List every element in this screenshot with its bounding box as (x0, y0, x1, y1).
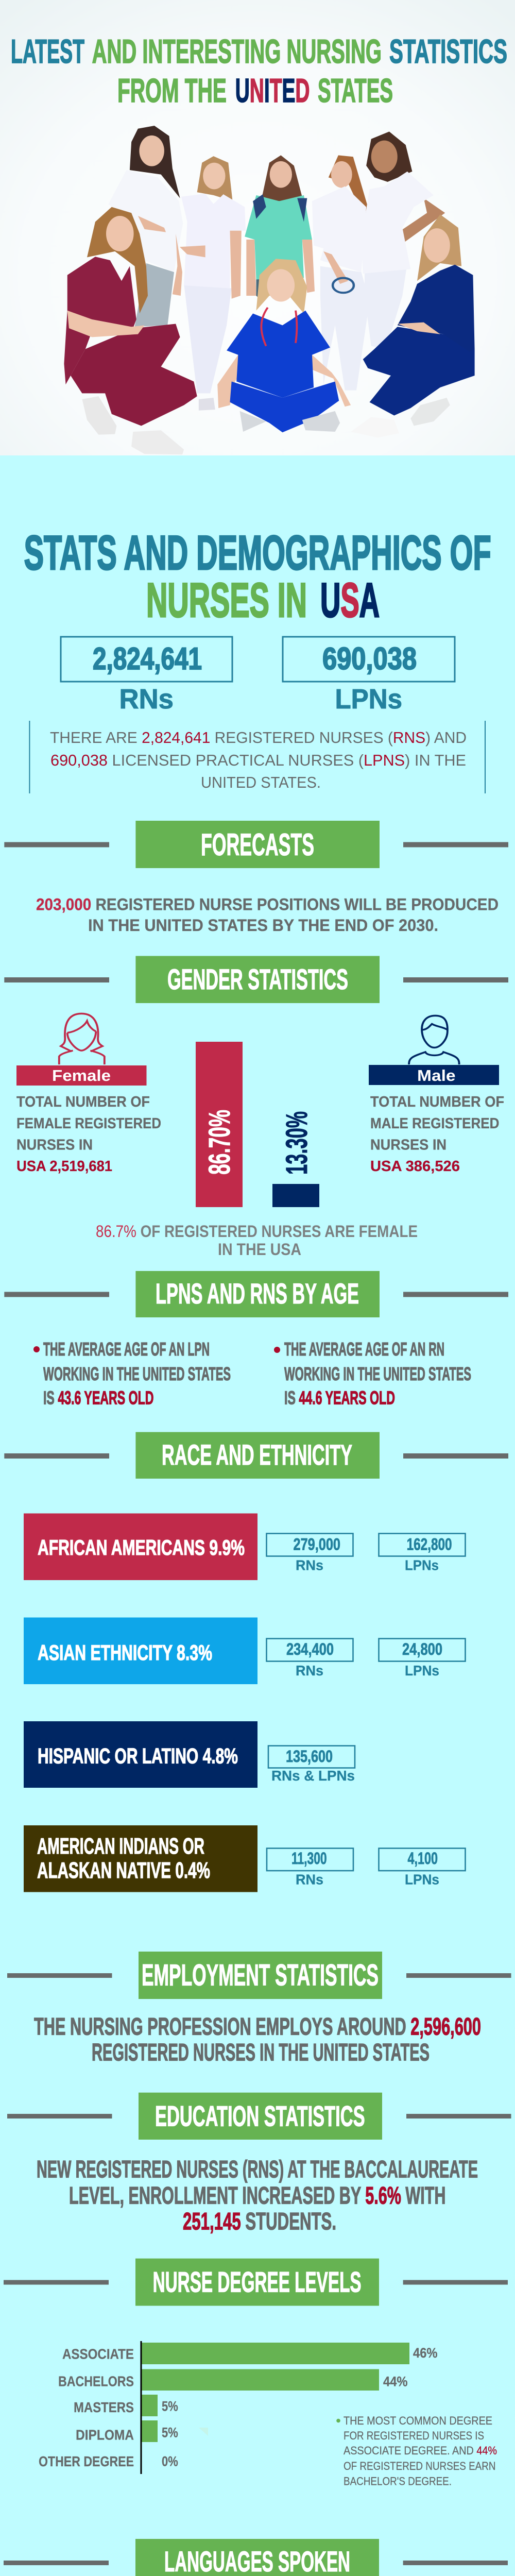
panel: African Americans: 279,000 (294, 1535, 340, 1554)
panel: American Indians or Alaskan Native: LPNs (405, 1872, 439, 1888)
text block: female registered nurses: USA 2,519,681 (16, 1158, 112, 1175)
title: STATES (318, 72, 393, 109)
bar chart: nurse degree levels: OTHER DEGREE (39, 2453, 134, 2469)
panel: American Indians or Alaskan Native: 11,300 (291, 1849, 327, 1868)
text block: average LPN age (33, 1338, 231, 1409)
text block: average LPN age: IS 43.6 YEARS OLD (43, 1387, 153, 1409)
text block: gender caption: 86.7% OF REGISTERED NURSES ARE FEMALE (96, 1222, 418, 1241)
stat: RNs count: RNs (119, 684, 174, 715)
text block: male registered nurses: TOTAL NUMBER OF (370, 1094, 504, 1110)
panel: African Americans: RNs (296, 1557, 323, 1573)
bar chart: nurse degree levels: MASTERS (74, 2399, 134, 2415)
callout: most common degree: THE MOST COMMON DEGREE (344, 2414, 492, 2427)
hero photo: group of nurses (0, 0, 515, 455)
text block: average LPN age: THE AVERAGE AGE OF AN LPN (43, 1338, 210, 1360)
title: LATEST (11, 32, 84, 70)
section heading: education statistics (7, 2093, 511, 2140)
nurse: back right in white (362, 131, 445, 349)
text block: gender caption (96, 1222, 418, 1259)
text block: education: 251,145 STUDENTS. (183, 2207, 336, 2235)
section heading: languages spoken (4, 2539, 508, 2576)
text block: female registered nurses (16, 1094, 161, 1175)
section heading: education statistics: EDUCATION STATISTICS (155, 2100, 365, 2132)
section heading: nurse degree levels (4, 2259, 508, 2306)
bar chart: nurse degree levels (39, 2341, 438, 2474)
text block: RN and LPN totals (29, 721, 486, 793)
title (11, 32, 507, 109)
label: female: Female (52, 1066, 111, 1084)
text block: average RN age (274, 1338, 471, 1409)
section heading: gender statistics (4, 956, 508, 1003)
stat: LPNs count: LPNs (335, 684, 402, 715)
text block: education (37, 2156, 478, 2235)
nurse: front right in navy (351, 214, 475, 438)
heading: stats and demographics: NURSES IN (146, 573, 307, 627)
text block: average RN age: IS 44.6 YEARS OLD (284, 1387, 395, 1409)
text block: forecast (36, 895, 499, 935)
panel: Hispanic or Latino: RNs & LPNs (271, 1768, 355, 1784)
text block: male registered nurses: NURSES IN (370, 1137, 447, 1153)
nurse: front centre in blue (217, 259, 351, 432)
bar chart: nurse degree levels: DIPLOMA (76, 2427, 134, 2443)
text block: education: LEVEL, ENROLLMENT INCREASED BY 5.6% WITH (69, 2181, 446, 2209)
section heading: LPNs and RNs by age: LPNS AND RNS BY AGE (156, 1277, 359, 1310)
text block: male registered nurses: USA 386,526 (370, 1158, 460, 1175)
nurse: back centre-right in white (312, 155, 370, 391)
panel: Asian ethnicity: 234,400 (286, 1640, 334, 1658)
icon: female nurse (59, 1013, 105, 1064)
text block: forecast: IN THE UNITED STATES BY THE END OF 2030. (88, 916, 438, 935)
panel: Asian ethnicity: ASIAN ETHNICITY 8.3% (38, 1640, 212, 1665)
panel: Hispanic or Latino (24, 1721, 355, 1788)
panel: African Americans: AFRICAN AMERICANS 9.9% (38, 1535, 245, 1560)
bar chart: nurse degree levels: BACHELORS (58, 2374, 134, 2389)
nurse: back centre in teal (245, 155, 315, 301)
nurse: back centre-left in white (180, 156, 246, 411)
heading: stats and demographics: USA (320, 573, 380, 627)
text block: female registered nurses: TOTAL NUMBER OF (16, 1094, 150, 1110)
text block: RN and LPN totals: THERE ARE 2,824,641 REGISTERED NURSES (RNS) AND (50, 728, 467, 747)
section heading: nurse degree levels: NURSE DEGREE LEVELS (153, 2266, 362, 2298)
panel: Asian ethnicity: RNs (296, 1663, 323, 1679)
panel: American Indians or Alaskan Native: RNs (296, 1872, 323, 1888)
text block: gender caption: IN THE USA (218, 1240, 301, 1259)
stat: RNs count: 2,824,641 (93, 641, 202, 676)
panel: Asian ethnicity: LPNs (405, 1663, 439, 1679)
text block: RN and LPN totals: 690,038 LICENSED PRACTICAL NURSES (LPNS) IN THE (50, 751, 466, 769)
panel: American Indians or Alaskan Native: AMERICAN INDIANS OR (37, 1834, 204, 1859)
text block: female registered nurses: FEMALE REGISTERED (16, 1115, 161, 1132)
text block: average LPN age: WORKING IN THE UNITED STATES (43, 1363, 231, 1384)
panel: American Indians or Alaskan Native: 4,100 (408, 1849, 438, 1868)
callout: most common degree: FOR REGISTERED NURSES IS (344, 2429, 484, 2442)
bar chart: gender share: 13.30% (280, 1111, 314, 1175)
panel: African Americans (24, 1514, 466, 1580)
bar chart: nurse degree levels: 5% (162, 2425, 178, 2441)
panel: American Indians or Alaskan Native (24, 1825, 466, 1892)
nurse: back left in white (108, 126, 183, 327)
bar chart: nurse degree levels: 46% (413, 2345, 438, 2361)
callout: most common degree (336, 2414, 497, 2487)
stat: LPNs count (283, 637, 455, 715)
section heading: LPNs and RNs by age (4, 1271, 508, 1317)
section heading: race and ethnicity (4, 1432, 508, 1479)
stat: RNs count (61, 637, 232, 715)
icon: male nurse (409, 1015, 459, 1064)
panel: African Americans: 162,800 (407, 1535, 452, 1554)
nurse: front left in maroon (64, 207, 197, 454)
panel: Hispanic or Latino: HISPANIC OR LATINO 4.8% (38, 1743, 238, 1768)
callout: most common degree: BACHELOR'S DEGREE. (344, 2475, 452, 2487)
panel: Asian ethnicity: 24,800 (402, 1640, 442, 1658)
text block: male registered nurses (370, 1094, 504, 1175)
label: male (369, 1065, 499, 1085)
panel: African Americans: LPNs (405, 1557, 439, 1573)
section heading: employment statistics (7, 1952, 511, 1999)
text block: RN and LPN totals: UNITED STATES. (201, 773, 321, 791)
heading: stats and demographics (24, 526, 491, 627)
bar chart: nurse degree levels: 0% (162, 2454, 178, 2469)
text block: employment (34, 2012, 481, 2066)
bar chart: nurse degree levels: 5% (162, 2399, 178, 2414)
bar chart: gender share: 86.70% (203, 1110, 236, 1175)
text block: male registered nurses: MALE REGISTERED (370, 1115, 500, 1132)
bar chart: gender share (196, 1042, 319, 1207)
title: FROM THE (117, 72, 227, 109)
bar chart: nurse degree levels: ASSOCIATE (62, 2346, 134, 2362)
bar chart: nurse degree levels: 44% (383, 2374, 408, 2389)
title: UNITED (235, 72, 310, 109)
callout: most common degree: ASSOCIATE DEGREE. AND 44% (344, 2444, 497, 2457)
section heading: race and ethnicity: RACE AND ETHNICITY (162, 1438, 352, 1471)
panel: Asian ethnicity (24, 1618, 466, 1684)
text block: female registered nurses: NURSES IN (16, 1137, 93, 1153)
panel: Hispanic or Latino: 135,600 (286, 1747, 333, 1766)
stat: LPNs count: 690,038 (322, 641, 417, 676)
panel: American Indians or Alaskan Native: ALASKAN NATIVE 0.4% (37, 1858, 210, 1883)
label: male: Male (417, 1066, 456, 1084)
label: female (16, 1065, 146, 1086)
section heading: forecasts (4, 821, 508, 868)
section heading: forecasts: FORECASTS (201, 827, 314, 862)
section heading: gender statistics: GENDER STATISTICS (167, 963, 348, 995)
